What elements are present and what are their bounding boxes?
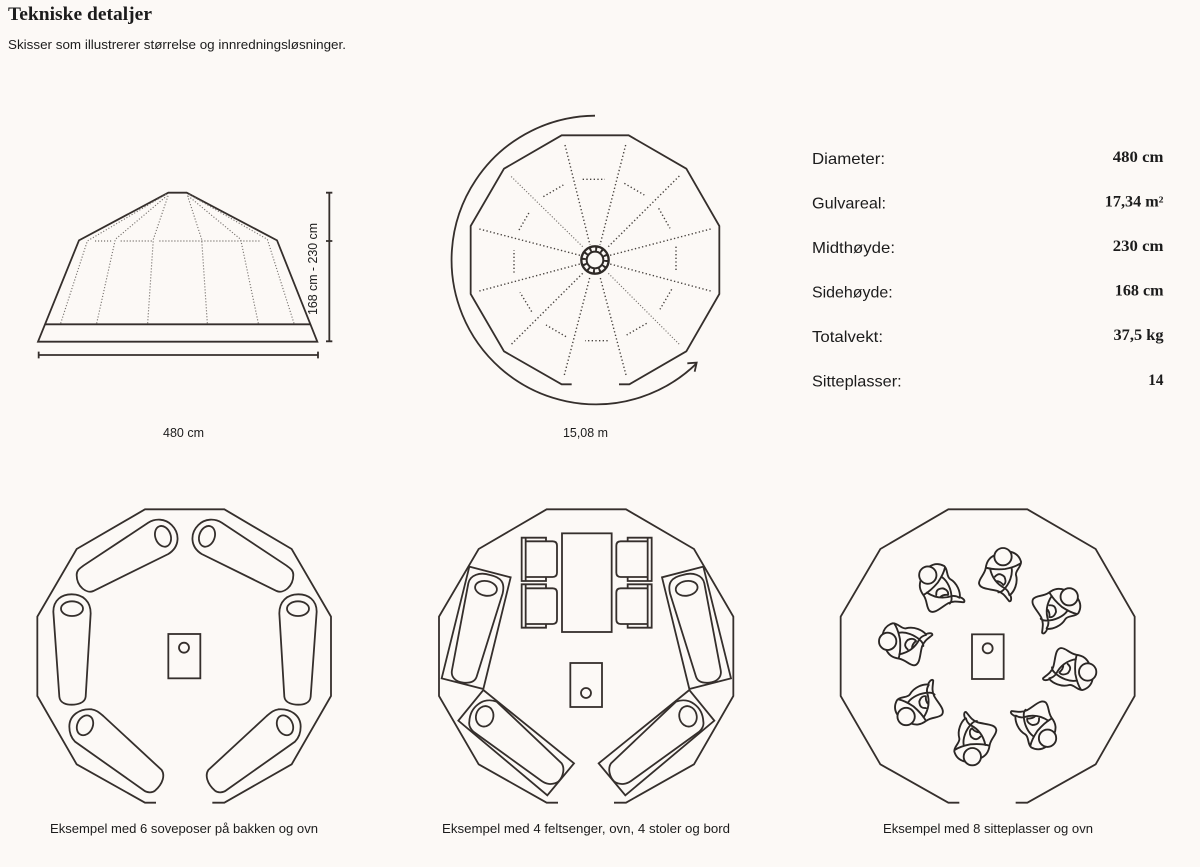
spec: side height bbox=[812, 282, 1164, 302]
sleeping bag: top right bbox=[192, 520, 293, 592]
spec: floor area: Gulvareal: bbox=[812, 196, 886, 212]
tent floor outline bbox=[37, 509, 331, 803]
spec: total weight bbox=[812, 327, 1164, 346]
spec: total weight: 37,5 kg bbox=[1114, 327, 1164, 344]
stove bbox=[972, 634, 1004, 679]
table bbox=[562, 533, 612, 632]
caption: sleeping bags: Eksempel med 6 soveposer på bakken og ovn bbox=[50, 822, 318, 836]
caption: cots: Eksempel med 4 feltsenger, ovn, 4 stoler og bord bbox=[442, 822, 730, 836]
tent floor outline bbox=[841, 509, 1135, 803]
chair: bottom right bbox=[616, 584, 652, 628]
sleeping bag: right bbox=[279, 594, 317, 705]
person 2 bbox=[1021, 574, 1088, 641]
sleeping bag: bottom right bbox=[207, 709, 301, 792]
dodecagon outline bbox=[471, 135, 719, 384]
cot: upper left bbox=[442, 567, 511, 689]
cot: upper right bbox=[662, 567, 731, 689]
panel: layout with 8 seated people bbox=[841, 509, 1135, 803]
panel: side view of tent bbox=[38, 193, 332, 358]
stove bbox=[570, 663, 602, 707]
panel: specifications bbox=[812, 149, 1164, 390]
chair: bottom left bbox=[522, 584, 557, 628]
person 5 bbox=[954, 712, 996, 765]
panel: layout with 6 sleeping bags bbox=[37, 509, 331, 803]
cot: lower right bbox=[599, 690, 714, 795]
stove bbox=[168, 634, 200, 678]
person 7 bbox=[879, 623, 932, 665]
spec: centre height: Midthøyde: bbox=[812, 240, 895, 257]
spec: diameter: Diameter: bbox=[812, 151, 885, 168]
caption: seating: Eksempel med 8 sitteplasser og ovn bbox=[883, 822, 1093, 836]
height dimension line bbox=[326, 193, 332, 341]
chair: top right bbox=[616, 538, 652, 581]
spec: total weight: Totalvekt: bbox=[812, 329, 883, 346]
spec: diameter bbox=[812, 149, 1164, 168]
sleeping bag: top left bbox=[77, 520, 178, 592]
panel: layout with cots, chairs and table bbox=[439, 509, 733, 803]
spec: side height: 168 cm bbox=[1115, 282, 1164, 299]
sleeping bag: bottom left bbox=[69, 709, 163, 792]
caption: circumference: 15,08 m bbox=[563, 426, 608, 440]
spec: centre height: 230 cm bbox=[1113, 238, 1164, 255]
width dimension line bbox=[39, 352, 318, 358]
person 4 bbox=[1003, 690, 1071, 757]
person 3 bbox=[1043, 648, 1096, 690]
spec: side height: Sidehøyde: bbox=[812, 284, 893, 302]
dotted seams bbox=[61, 194, 294, 323]
spec: floor area bbox=[812, 194, 1164, 212]
height label: 168 cm - 230 cm bbox=[305, 223, 320, 315]
person 6 bbox=[887, 672, 955, 740]
tent outline bbox=[38, 193, 317, 342]
floor band line bbox=[45, 322, 311, 327]
dotted spokes bbox=[479, 145, 711, 375]
caption: width: 480 cm bbox=[163, 426, 204, 440]
spec: centre height bbox=[812, 238, 1164, 257]
spec: seats: Sitteplasser: bbox=[812, 374, 902, 390]
centre ring bbox=[581, 246, 609, 274]
chair: top left bbox=[522, 538, 557, 581]
spec: seats bbox=[812, 372, 1164, 390]
cot: lower left bbox=[458, 690, 574, 795]
subtitle: Skisser som illustrerer størrelse og innredningsløsninger. bbox=[8, 37, 346, 52]
spec: floor area: 17,34 m² bbox=[1105, 194, 1164, 211]
tent floor outline bbox=[439, 509, 733, 803]
person 8 bbox=[905, 556, 972, 624]
spec: seats: 14 bbox=[1148, 372, 1164, 389]
sleeping bag: left bbox=[53, 594, 91, 705]
title: Tekniske detaljer bbox=[8, 5, 152, 25]
circumference arrow bbox=[452, 116, 697, 404]
person 1 bbox=[979, 548, 1021, 601]
spec: diameter: 480 cm bbox=[1113, 149, 1164, 166]
panel: top view of tent bbox=[452, 116, 719, 404]
